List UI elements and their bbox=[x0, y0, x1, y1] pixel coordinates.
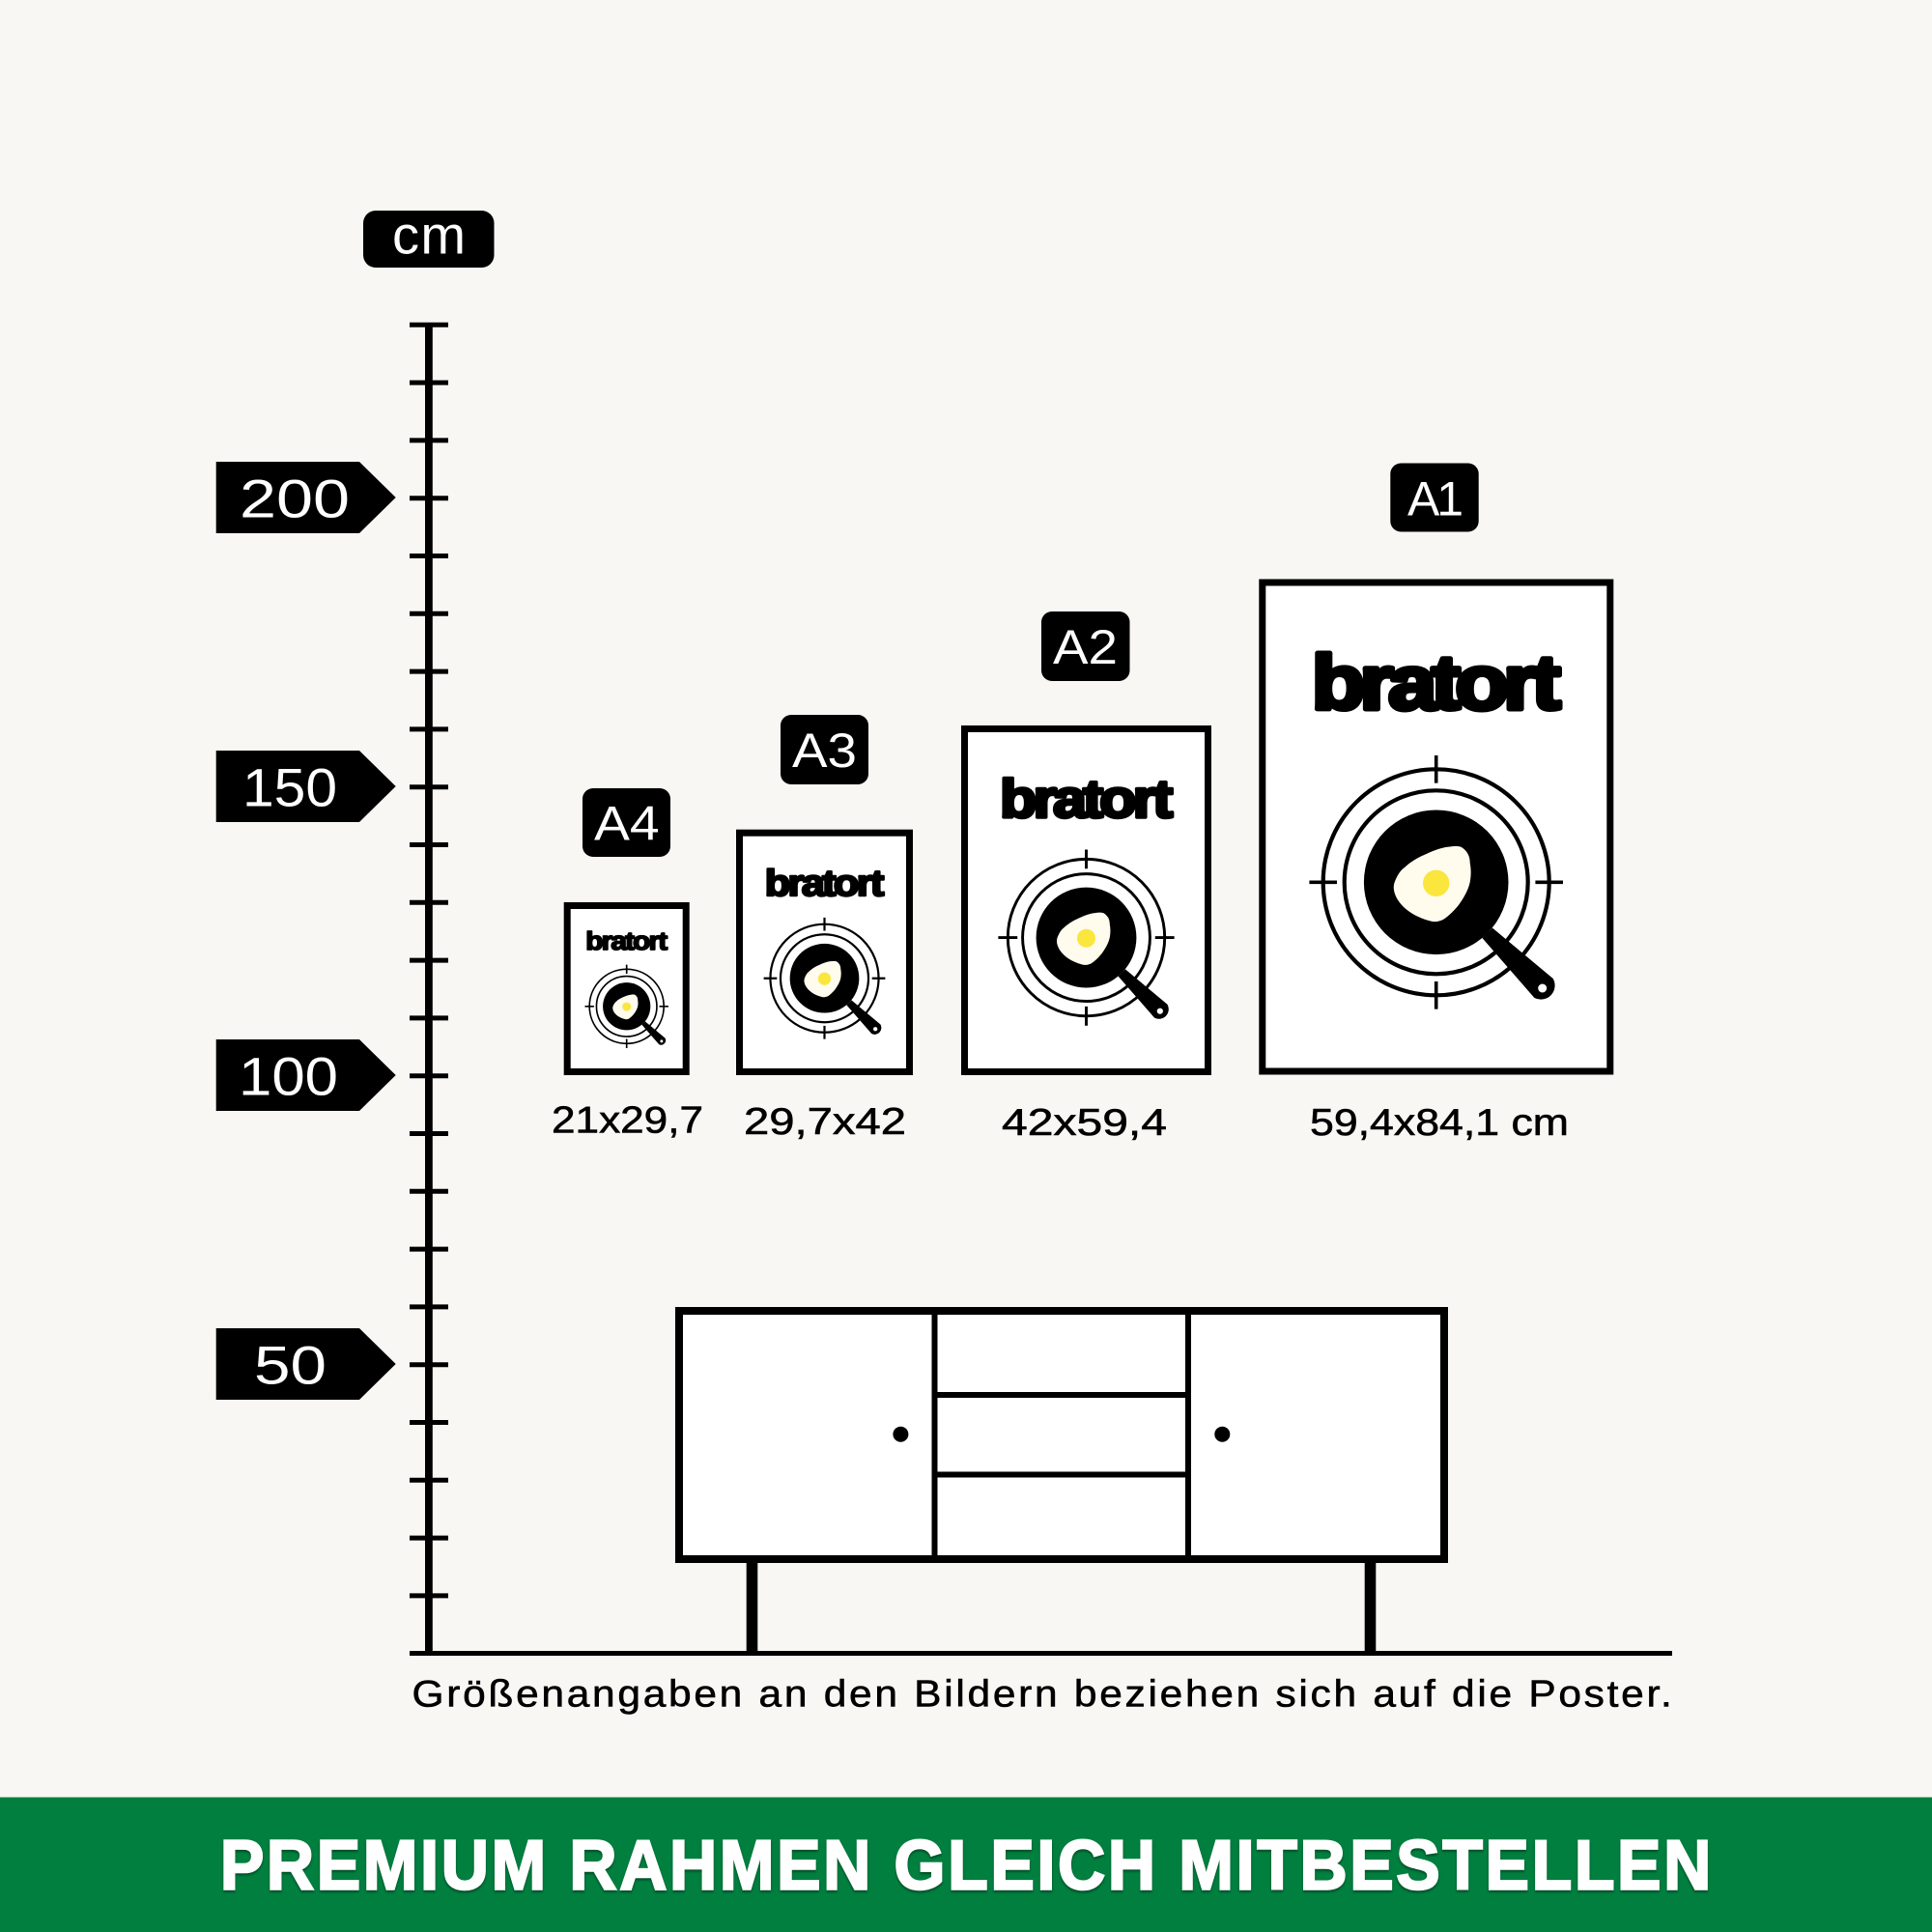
ruler label: 150: 150 bbox=[242, 757, 337, 817]
height ruler bbox=[410, 325, 448, 1654]
size badge: A4: A4 bbox=[594, 796, 660, 850]
poster: A2: bratort bbox=[1000, 769, 1173, 829]
size badge: A2 bbox=[1041, 611, 1130, 681]
size badge: A3 bbox=[781, 715, 868, 784]
ruler label: 50 bbox=[216, 1328, 396, 1400]
poster: A3 bbox=[740, 833, 910, 1072]
dimensions: A2: 42x59,4 bbox=[1002, 1102, 1167, 1144]
dimensions: A1: 59,4x84,1 cm bbox=[1310, 1102, 1569, 1144]
banner bbox=[0, 1797, 1932, 1932]
poster: A1 bbox=[1263, 582, 1610, 1071]
unit label: cm bbox=[363, 205, 495, 268]
poster: A1: bratort bbox=[1312, 639, 1560, 725]
sideboard bbox=[679, 1310, 1444, 1652]
ruler label: 50: 50 bbox=[254, 1335, 327, 1395]
footnote: Größenangaben an den Bildern beziehen sich auf die Poster. bbox=[412, 1674, 1675, 1716]
ruler label: 200: 200 bbox=[240, 469, 350, 529]
size badge: A1: A1 bbox=[1407, 471, 1463, 526]
size badge: A4 bbox=[582, 788, 670, 857]
size badge: A1 bbox=[1390, 464, 1479, 531]
ruler label: 150 bbox=[216, 751, 396, 822]
unit label: cm: cm bbox=[392, 205, 466, 266]
ruler label: 200 bbox=[216, 462, 396, 533]
dimensions: A3: 29,7x42 bbox=[744, 1101, 906, 1143]
poster: A4 bbox=[567, 906, 686, 1072]
ruler label: 100 bbox=[216, 1039, 396, 1111]
size badge: A3: A3 bbox=[792, 724, 857, 778]
banner: PREMIUM RAHMEN GLEICH MITBESTELLEN bbox=[220, 1828, 1714, 1905]
ruler label: 100: 100 bbox=[239, 1045, 338, 1107]
floor line bbox=[410, 1651, 1672, 1656]
poster: A4: bratort bbox=[585, 926, 668, 955]
poster: A3: bratort bbox=[765, 863, 885, 904]
poster: A2 bbox=[964, 728, 1208, 1072]
dimensions: A4: 21x29,7 bbox=[552, 1100, 703, 1142]
size badge: A2: A2 bbox=[1053, 620, 1118, 674]
